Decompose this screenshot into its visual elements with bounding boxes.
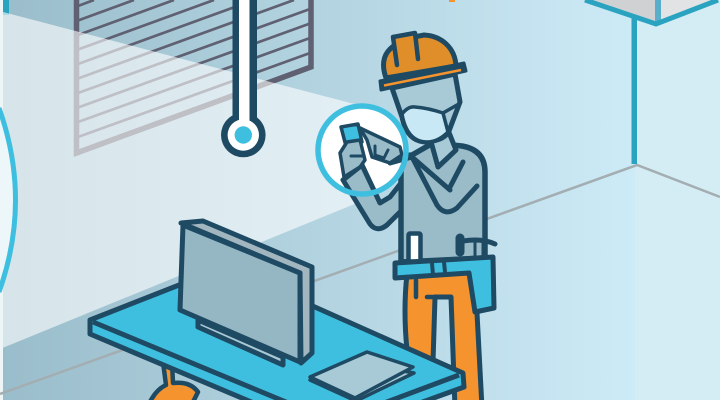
right wall panel xyxy=(635,0,720,400)
light beam xyxy=(0,12,362,349)
hammer xyxy=(460,238,495,257)
monitor stand xyxy=(198,320,283,365)
face mask xyxy=(402,105,457,142)
trousers xyxy=(405,272,482,400)
torso xyxy=(401,143,485,262)
floor line xyxy=(0,165,720,394)
wall pipe with gauge xyxy=(221,0,266,157)
monitor screen xyxy=(180,225,300,362)
tool belt and pouch xyxy=(395,257,494,312)
pen in pocket xyxy=(408,234,420,262)
desk xyxy=(88,282,466,400)
orange mark at top xyxy=(449,0,455,2)
left lens circle xyxy=(0,110,16,290)
hard hat xyxy=(380,33,466,90)
monitor side and top xyxy=(181,221,312,363)
phone and hands xyxy=(340,124,402,177)
neck xyxy=(430,130,456,167)
zoom circle ring xyxy=(318,106,406,194)
left edge strip xyxy=(0,0,9,400)
computer monitor xyxy=(180,221,312,365)
head xyxy=(392,74,460,142)
left lens ring xyxy=(0,108,16,292)
zoom circle background xyxy=(320,108,404,189)
papers on desk xyxy=(310,352,414,400)
stool base xyxy=(148,362,198,400)
worker xyxy=(318,33,495,400)
folded arms xyxy=(343,157,477,229)
ceiling box xyxy=(583,0,720,164)
window blinds xyxy=(76,0,311,153)
